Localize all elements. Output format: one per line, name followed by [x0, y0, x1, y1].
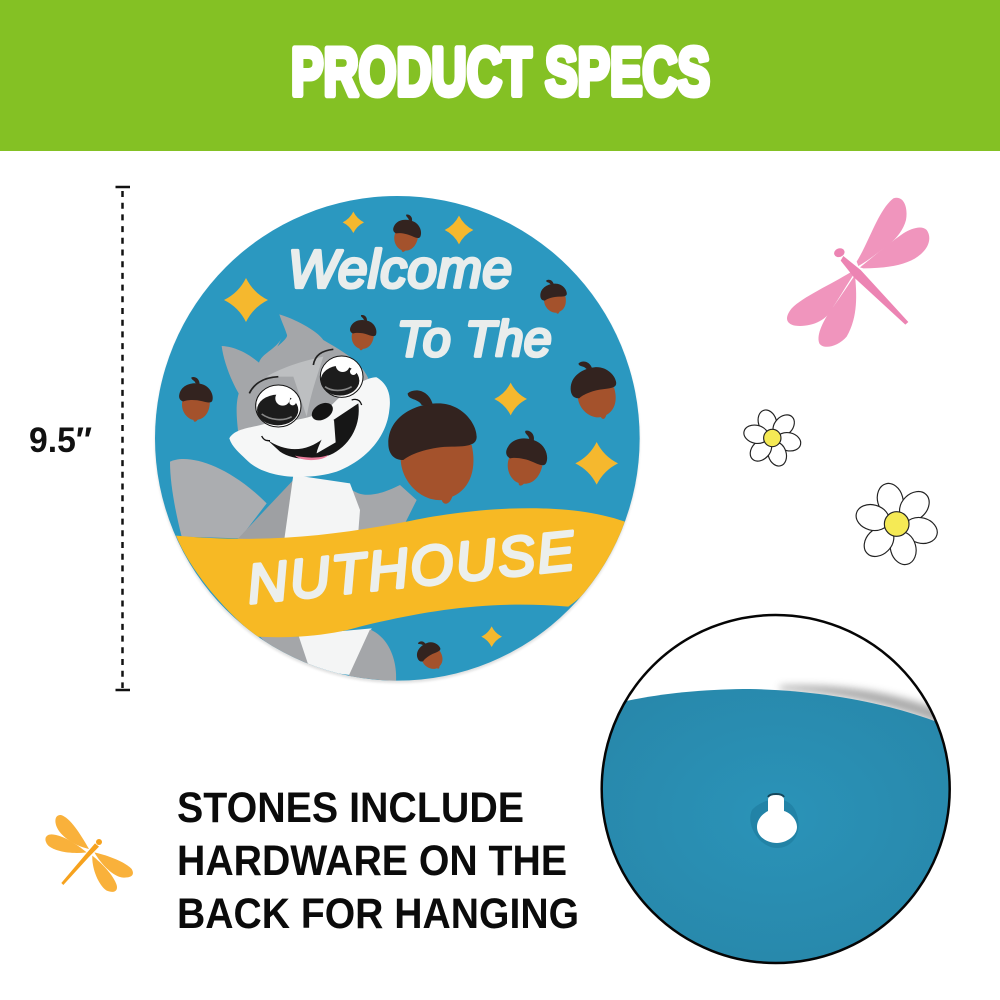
stone back — [590, 689, 960, 970]
header banner — [0, 0, 1000, 151]
inset photo: hanging hole on back — [590, 615, 960, 970]
orange dragonfly — [45, 815, 133, 892]
stone text: nuthouse: NUTHOUSE — [244, 519, 578, 615]
squirrel — [170, 314, 417, 542]
stone text: welcome: Welcome — [288, 241, 512, 300]
hardware caption — [177, 784, 579, 938]
hardware caption: STONES INCLUDE — [177, 784, 524, 832]
stepping stone product — [155, 196, 640, 683]
dimension line — [116, 187, 130, 690]
small daisy — [742, 408, 803, 468]
large daisy — [853, 480, 940, 568]
dimension label: 9.5″ — [29, 421, 92, 460]
lower squirrel body — [260, 628, 396, 682]
hardware caption: HARDWARE ON THE — [177, 837, 567, 885]
mouth — [262, 399, 362, 460]
acorn group — [173, 211, 619, 674]
pink dragonfly — [787, 198, 929, 347]
hardware caption: BACK FOR HANGING — [177, 890, 579, 938]
keyhole — [750, 794, 799, 848]
yellow banner — [176, 508, 625, 637]
eyes — [249, 349, 363, 427]
title: PRODUCT SPECS — [291, 34, 710, 110]
stars — [224, 212, 618, 647]
large acorn — [388, 390, 477, 504]
stone text: to the: To The — [397, 311, 552, 367]
